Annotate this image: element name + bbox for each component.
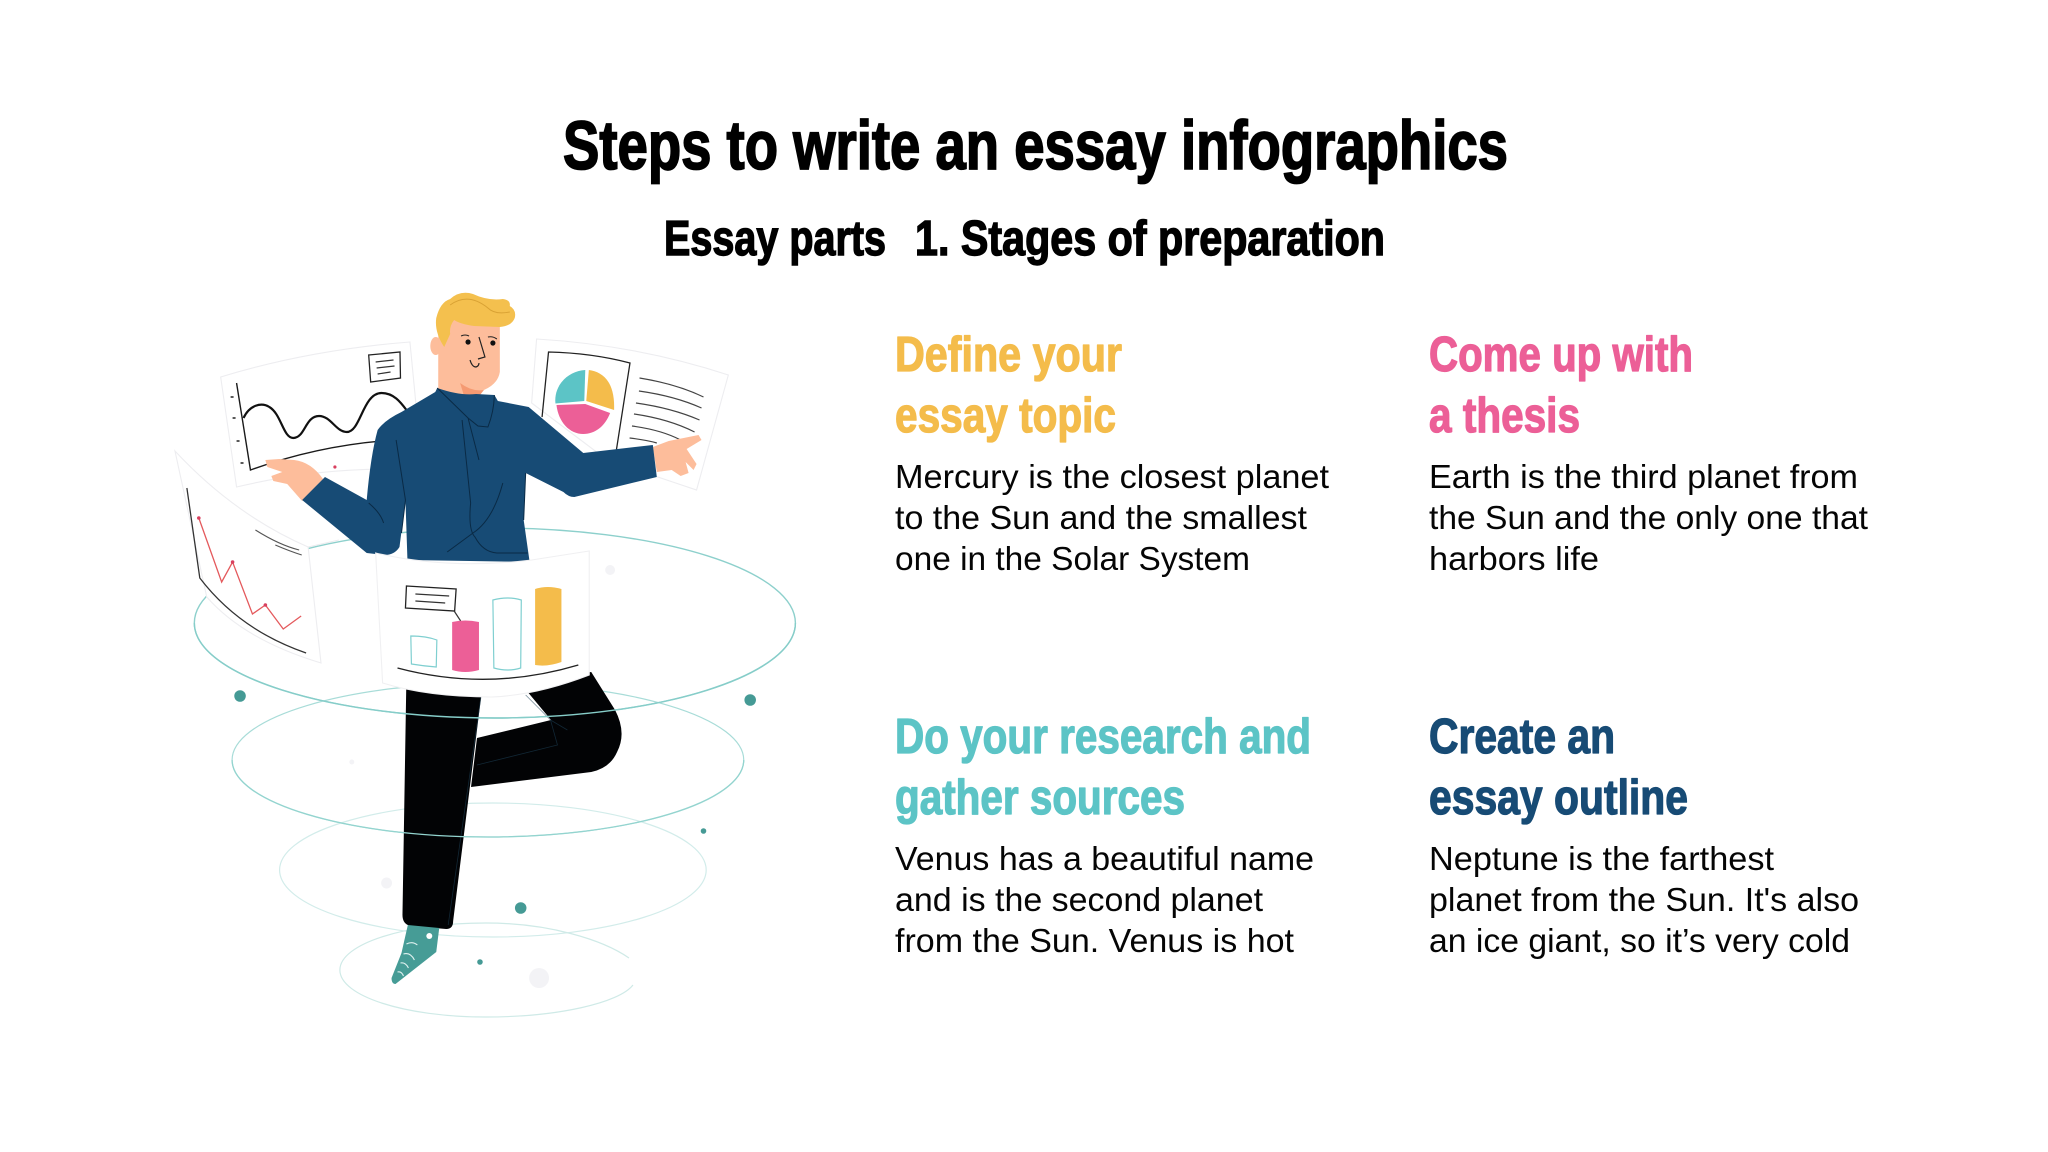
body text: Neptune is the farthest	[1429, 840, 1774, 877]
panel: red line chart left	[175, 451, 339, 663]
body text: harbors life	[1429, 540, 1599, 577]
orbit ellipses behind figure	[194, 528, 795, 1017]
panel: pie chart top right	[532, 339, 728, 490]
body text: one in the Solar System	[895, 540, 1250, 577]
heading	[895, 328, 1122, 443]
body text: the Sun and the only one that	[1429, 499, 1868, 536]
man figure	[265, 293, 702, 984]
body text: Mercury is the closest planet	[895, 458, 1329, 495]
right hand	[653, 435, 702, 476]
orbit ellipses in front of legs	[194, 623, 795, 837]
subtitle	[664, 212, 1385, 266]
heading: Create an	[1429, 710, 1615, 764]
bars	[411, 636, 437, 667]
body text: Venus has a beautiful name	[895, 840, 1314, 877]
heading: gather sources	[895, 771, 1185, 825]
panel: come up with a thesis	[1429, 328, 1868, 577]
body text	[1429, 840, 1859, 959]
body text: from the Sun. Venus is hot	[895, 922, 1294, 959]
decorative dots	[234, 565, 756, 988]
heading: a thesis	[1429, 389, 1580, 443]
body text: planet from the Sun. It's also	[1429, 881, 1859, 918]
heading	[1429, 710, 1688, 825]
illustration: man with floating charts	[175, 293, 795, 1017]
body text	[1429, 458, 1868, 577]
body text: Earth is the third planet from	[1429, 458, 1858, 495]
heading	[1429, 328, 1693, 443]
panel: bar chart front	[376, 551, 589, 697]
standing leg	[402, 675, 482, 929]
eyes and eyebrows	[465, 339, 471, 345]
hair	[436, 293, 515, 347]
panel: define your essay topic	[895, 328, 1329, 577]
body text	[895, 458, 1329, 577]
left hand	[265, 459, 323, 501]
callout note	[405, 586, 456, 611]
panel: do your research and gather sources	[895, 710, 1314, 959]
heading: essay outline	[1429, 771, 1688, 825]
trouser creases	[448, 695, 567, 925]
shirt folds	[369, 388, 528, 553]
neck and face	[430, 293, 515, 400]
heading: Come up with	[1429, 328, 1693, 382]
shoe	[392, 925, 439, 984]
nose and smile	[470, 337, 485, 367]
panel: create an essay outline	[1429, 710, 1859, 959]
heading: Do your research and	[895, 710, 1311, 764]
panel: line chart top left	[221, 342, 422, 487]
title: Steps to write an essay infographics	[563, 107, 1508, 184]
subtitle: 1. Stages of preparation	[915, 212, 1385, 266]
body text: an ice giant, so it’s very cold	[1429, 922, 1850, 959]
body text: to the Sun and the smallest	[895, 499, 1307, 536]
heading	[895, 710, 1311, 825]
heading: essay topic	[895, 389, 1116, 443]
bent leg	[471, 672, 622, 787]
body text	[895, 840, 1314, 959]
subtitle: Essay parts	[664, 212, 886, 266]
body text: and is the second planet	[895, 881, 1263, 918]
heading: Define your	[895, 328, 1122, 382]
shirt	[302, 388, 657, 562]
